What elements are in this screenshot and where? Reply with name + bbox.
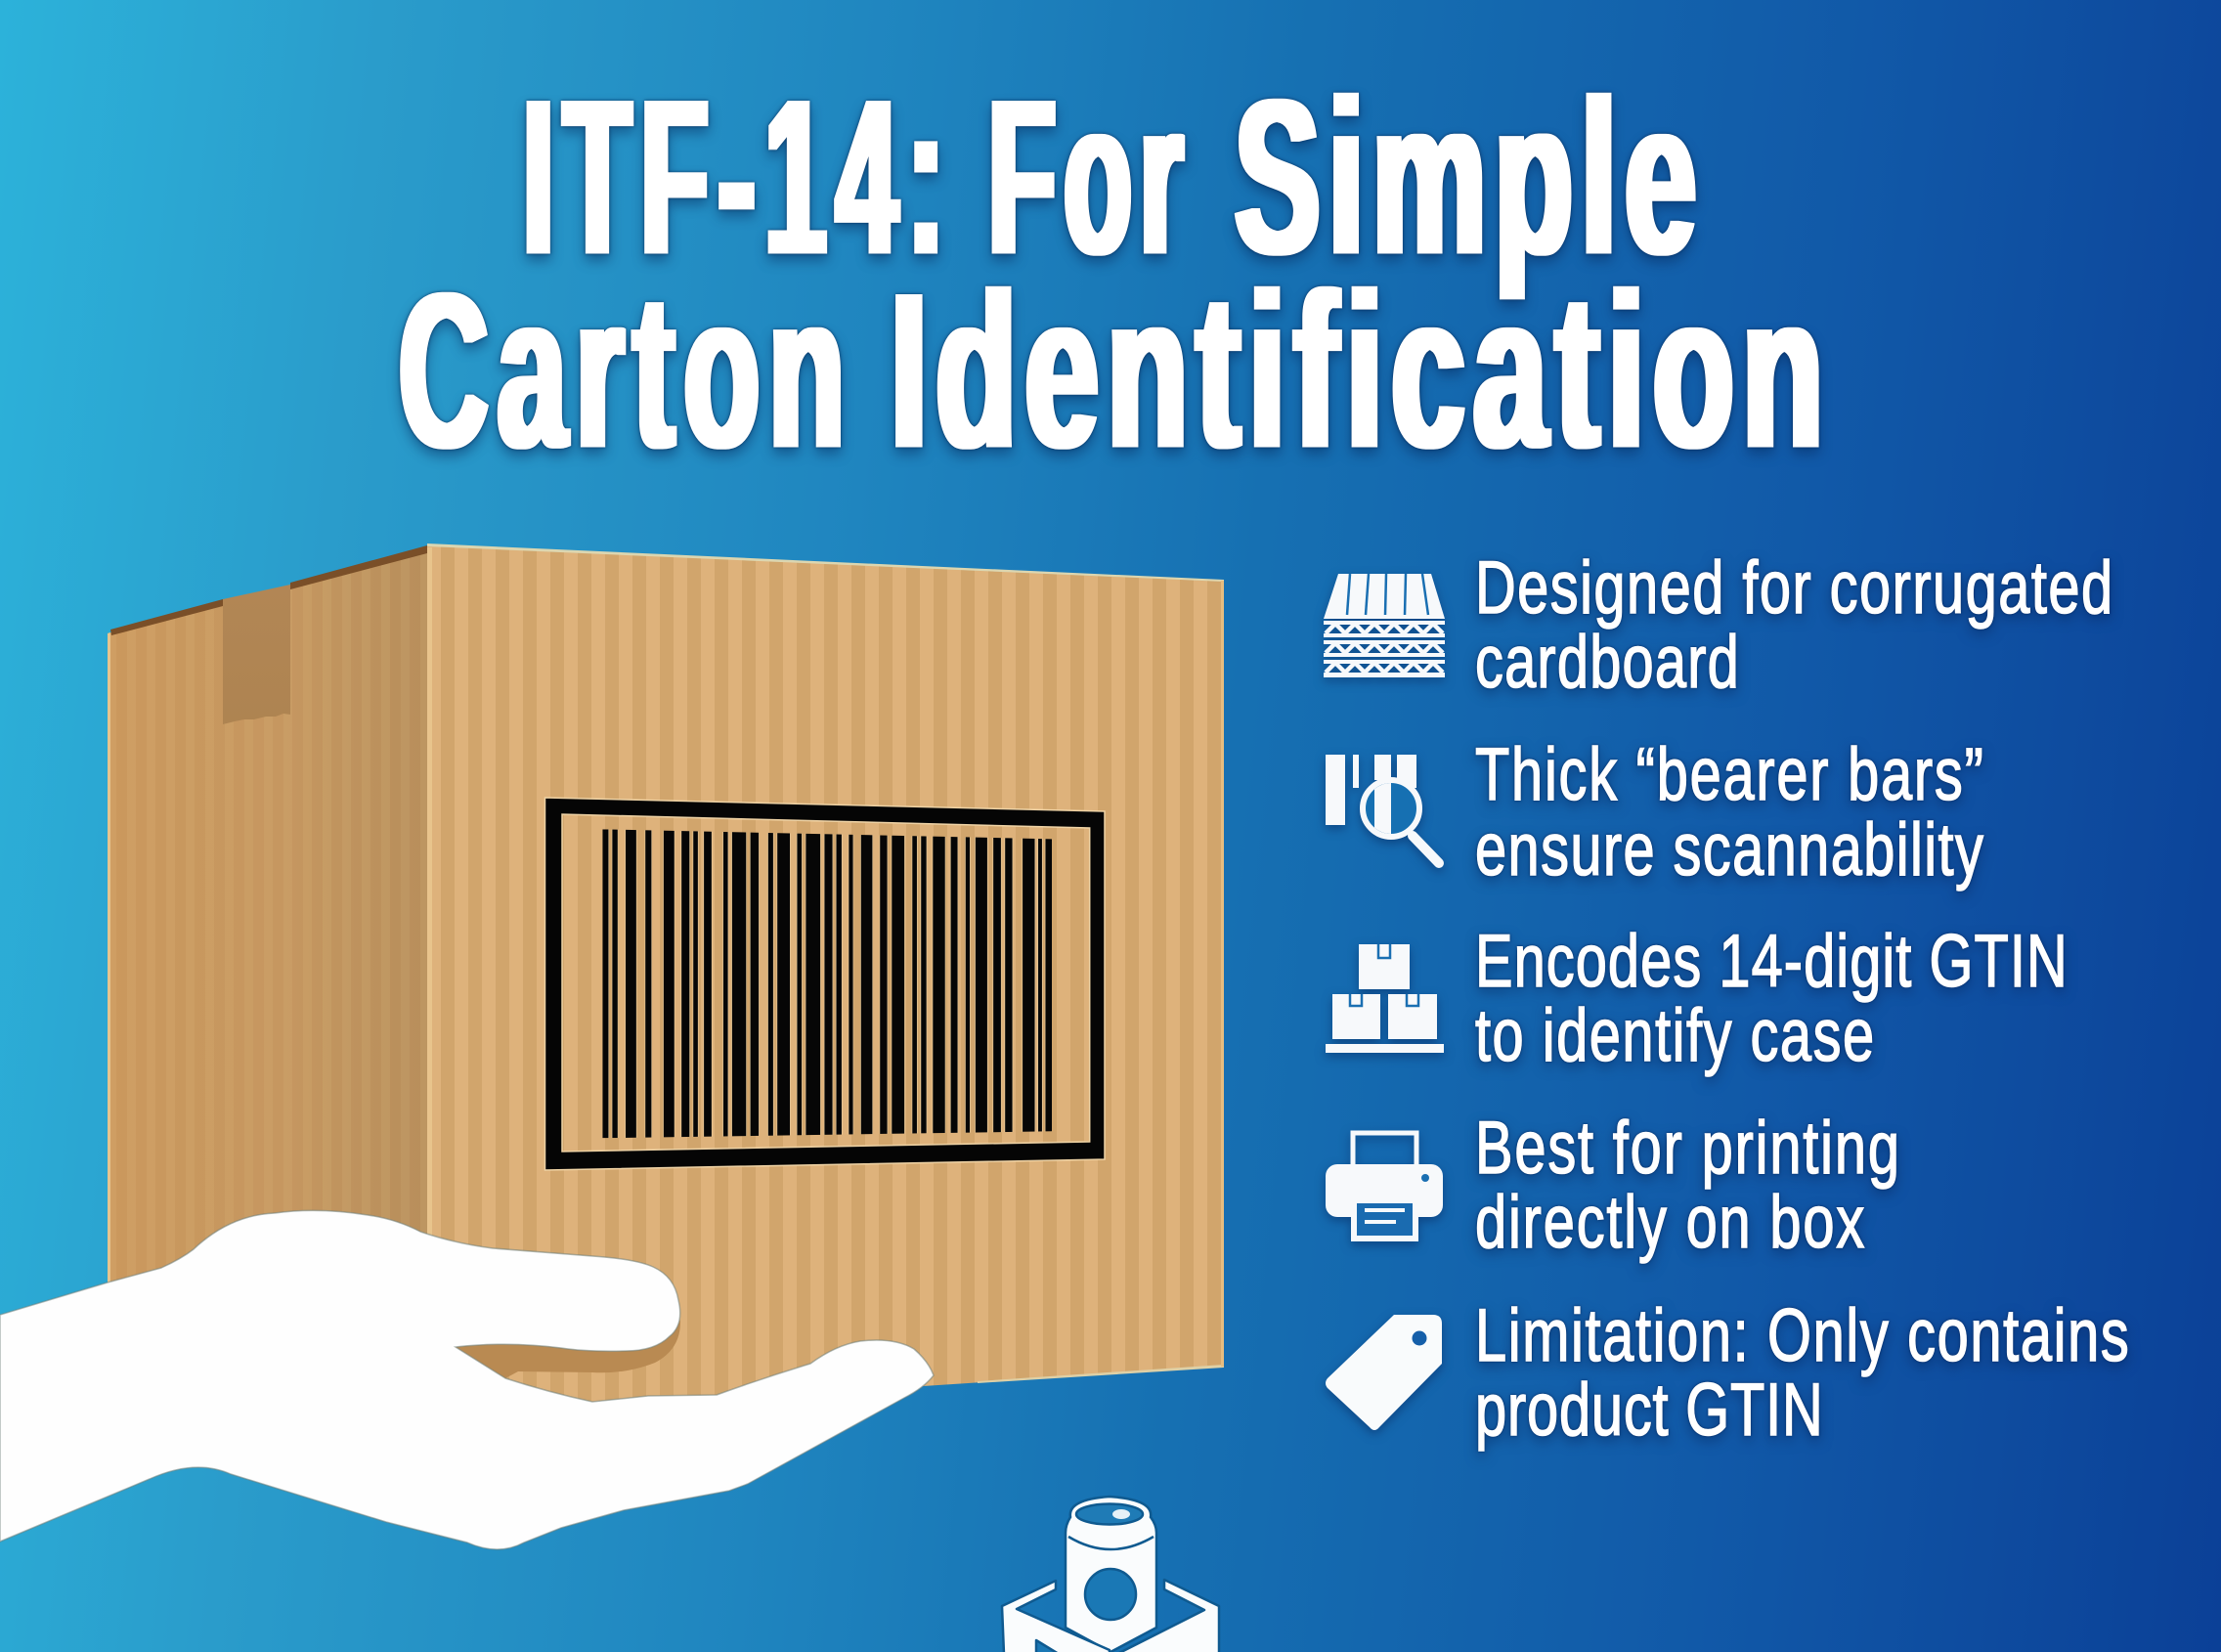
can <box>1066 1497 1156 1652</box>
feature: bearer bars <box>1475 733 1983 891</box>
icon: stacked boxes on pallet <box>1326 944 1444 1053</box>
thumb shadow on box <box>456 1320 680 1378</box>
white hand holding box <box>0 1210 934 1549</box>
box edges <box>427 543 1224 1417</box>
feature: printing: directly on box <box>1475 1181 1864 1264</box>
feature: bearer bars: ensure scannability <box>1475 808 1983 891</box>
title: ITF-14: <box>523 53 944 300</box>
feature: GTIN: to identify case <box>1475 994 1874 1077</box>
feature: bearer bars: Thick “bearer bars” <box>1475 733 1983 816</box>
feature: limitation <box>1475 1294 2129 1452</box>
title: Identification <box>891 247 1823 495</box>
icon: printer <box>1326 1133 1443 1241</box>
barcode frame <box>545 798 1105 1170</box>
feature: GTIN <box>1475 920 2068 1077</box>
feature: corrugated: cardboard <box>1475 621 1739 704</box>
icon: price tag <box>1326 1315 1442 1430</box>
feature: GTIN: Encodes 14-digit GTIN <box>1475 920 2068 1003</box>
title <box>399 53 1823 495</box>
feature: printing: Best for printing <box>1475 1107 1899 1190</box>
title: For <box>988 53 1183 300</box>
box left face <box>108 550 427 1417</box>
box front face <box>427 545 1224 1417</box>
feature: limitation: Limitation: Only contains <box>1475 1294 2129 1377</box>
barcode bars <box>602 814 1052 1153</box>
box flap edges <box>110 545 427 635</box>
feature list text <box>1475 546 2129 1452</box>
icon: corrugated cardboard <box>1324 574 1445 677</box>
icon: barcode with magnifier <box>1326 755 1439 863</box>
feature: printing <box>1475 1107 1899 1264</box>
open box <box>1002 1580 1219 1652</box>
feature: corrugated <box>1475 546 2112 704</box>
icon: can in open box <box>1002 1497 1219 1652</box>
title: Carton <box>399 246 845 494</box>
feature: corrugated: Designed for corrugated <box>1475 546 2112 630</box>
title: Simple <box>1235 55 1696 301</box>
feature: limitation: product GTIN <box>1475 1369 1823 1452</box>
box tape <box>223 585 290 724</box>
cardboard box with barcode <box>108 543 1224 1417</box>
